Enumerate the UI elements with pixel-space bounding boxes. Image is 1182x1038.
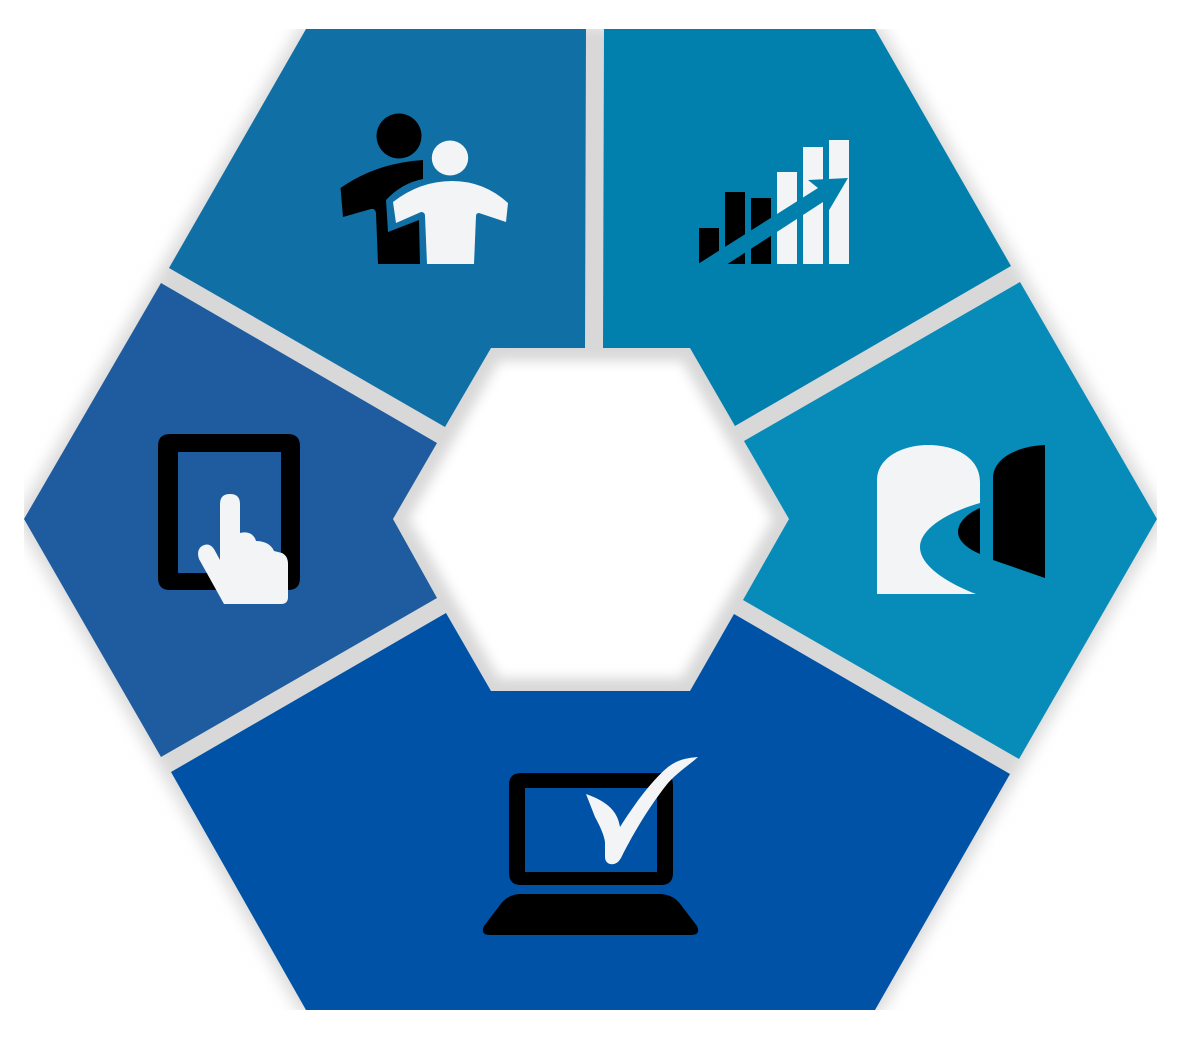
icon: tablet with pointing hand (158, 434, 300, 604)
panel: bottom (171, 613, 1010, 1010)
panel: top right (603, 29, 1011, 426)
icon: road through arches (877, 445, 1045, 594)
panel: right (743, 282, 1157, 759)
panel: top left (169, 29, 586, 427)
panel: left (24, 283, 437, 757)
icon: two people (340, 114, 508, 264)
icon: laptop with check mark (483, 757, 698, 935)
icon: rising bar chart with arrow (698, 140, 849, 265)
center white hexagon (409, 361, 773, 678)
